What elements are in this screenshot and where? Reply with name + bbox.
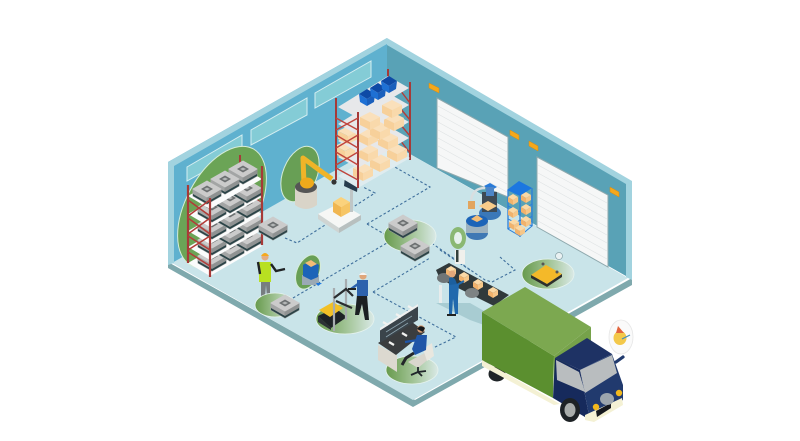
wifi bubble and tower <box>450 227 466 264</box>
lone robot <box>259 217 287 240</box>
right wall <box>387 38 632 280</box>
storage rack with robots <box>188 155 262 277</box>
weighing table <box>318 176 361 233</box>
left wall <box>168 38 387 265</box>
yellow forklift robot <box>316 279 374 334</box>
green disc and robot by vest worker <box>255 293 299 318</box>
floor base <box>168 141 632 407</box>
blue wire rack <box>507 181 532 237</box>
door slats <box>438 106 607 259</box>
conveyor worker <box>447 270 464 316</box>
roller doors <box>437 98 608 267</box>
green disc: rack <box>159 132 285 282</box>
dashed routes <box>285 157 515 348</box>
pizza bubble <box>609 320 633 354</box>
picking robot <box>468 183 501 220</box>
goods shelf <box>335 69 410 188</box>
robot arm <box>273 141 337 209</box>
conveyor belt <box>436 263 509 325</box>
wall windows <box>187 61 371 181</box>
small sensor icon <box>556 252 562 260</box>
wall lights <box>429 83 619 197</box>
delivery truck <box>482 287 623 422</box>
yellow robot disc <box>522 259 574 289</box>
control desk <box>378 304 425 372</box>
blue bin robot disc <box>291 251 325 293</box>
green disc with robots <box>384 215 436 261</box>
mobile carrier robot <box>466 215 488 240</box>
operator on chair <box>402 325 434 376</box>
scanning worker <box>348 272 369 320</box>
control desk disc <box>386 356 438 384</box>
worker in safety vest <box>258 253 285 302</box>
